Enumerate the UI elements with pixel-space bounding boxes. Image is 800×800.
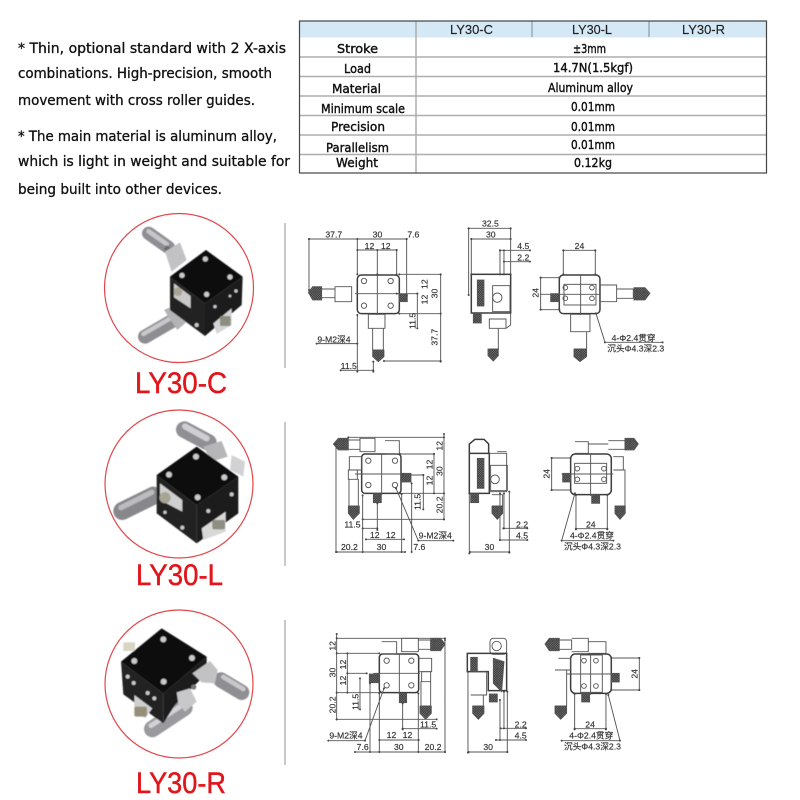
front view: 11.5: [413, 494, 423, 510]
specification table: 0.01mm: [571, 100, 615, 114]
panel: LY30-C product photo: [104, 214, 254, 362]
bottom view: [545, 638, 639, 751]
side view: [469, 218, 530, 361]
side view: 32.5: [482, 218, 499, 228]
front view: 11.5: [341, 361, 357, 371]
specification table: LY30-L: [572, 23, 612, 37]
label: LY30-L: LY30-L: [136, 559, 223, 592]
front view: 30: [435, 466, 445, 476]
front view: 37.7: [429, 329, 439, 346]
bottom view: 沉头Φ4.3深2.3: [564, 741, 621, 751]
panel: LY30-R technical drawing: [327, 634, 639, 753]
front view: 11.5: [408, 313, 418, 329]
front view: 12: [338, 660, 348, 669]
specification table: 0.01mm: [571, 138, 615, 152]
front view: 12: [338, 676, 348, 685]
front view: 7.6: [407, 230, 420, 240]
front view: 12: [403, 730, 412, 740]
side view: 2.2: [515, 719, 527, 729]
description text: * Thin, optional standard with 2 X-axis: [18, 41, 286, 57]
front view: 12: [419, 295, 429, 304]
front view: 12: [370, 530, 380, 540]
front view: 12: [435, 441, 445, 451]
bottom view: 24: [586, 519, 596, 529]
front view: 12: [419, 279, 429, 289]
front view: 12: [425, 476, 435, 485]
side view: [467, 638, 527, 753]
description text: [18, 41, 290, 198]
bottom view: [531, 241, 664, 362]
front view: 9-M2深4: [419, 531, 452, 541]
specification table: Precision: [331, 120, 385, 134]
front view: 12: [387, 730, 396, 740]
description text: being built into other devices.: [18, 182, 222, 198]
side view: 2.2: [516, 519, 528, 529]
bottom view: [541, 438, 638, 551]
panel: LY30-L product photo: [105, 410, 253, 558]
front view: 7.6: [357, 742, 369, 752]
side view: 30: [486, 230, 496, 240]
panel: LY30-R product photo: [105, 610, 253, 758]
front view: 12: [365, 241, 374, 251]
front view: 7.6: [413, 542, 426, 552]
specification table: 0.12kg: [574, 156, 612, 170]
description text: * The main material is aluminum alloy,: [18, 129, 277, 145]
front view: [327, 634, 445, 752]
divider bars: [284, 223, 286, 765]
specification table: Material: [332, 82, 381, 96]
side view: 30: [483, 742, 493, 752]
side view: [469, 439, 528, 553]
bottom view: 24: [541, 469, 551, 479]
front view: 12: [425, 460, 435, 469]
front view: [308, 230, 441, 372]
front view: 11.5: [420, 719, 436, 729]
description text: combinations. High-precision, smooth: [18, 66, 272, 82]
panel: LY30-C technical drawing: [308, 218, 664, 372]
description text: which is light in weight and suitable for: [18, 154, 290, 170]
specification table: 14.7N(1.5kgf): [553, 61, 633, 75]
front view: 9-M2深4: [317, 334, 351, 344]
front view: 20.2: [425, 742, 442, 752]
bottom view: 沉头Φ4.3深2.3: [607, 344, 664, 354]
bottom view: 24: [575, 241, 584, 251]
front view: 20.2: [327, 696, 337, 713]
bottom view: 24: [629, 669, 639, 679]
bottom view: 沉头Φ4.3深2.3: [564, 541, 621, 551]
front view: 12: [381, 241, 391, 251]
specification table: ±3mm: [573, 42, 606, 56]
front view: 20.2: [341, 542, 358, 552]
specification table: LY30-R: [682, 23, 725, 37]
bottom view: 24: [585, 719, 595, 729]
front view: 30: [327, 668, 337, 677]
front view: 30: [377, 542, 386, 552]
specification table: 0.01mm: [571, 120, 615, 134]
side view: 2.2: [517, 252, 530, 262]
front view: 37.7: [325, 230, 342, 240]
front view: [333, 434, 453, 552]
front view: 30: [373, 230, 382, 240]
front view: 12: [386, 530, 396, 540]
front view: 11.5: [344, 519, 361, 529]
side view: 30: [485, 542, 494, 552]
front view: 20.2: [435, 496, 445, 513]
specification table: Minimum scale: [321, 102, 405, 116]
specification table: [300, 21, 766, 173]
specification table: LY30-C: [450, 23, 493, 37]
side view: 4.5: [516, 531, 528, 541]
side view: 4.5: [517, 241, 530, 251]
front view: 12: [327, 641, 337, 651]
bottom view: 4-Φ2.4贯穿: [612, 332, 656, 343]
bottom view: 4-Φ2.4贯穿: [570, 530, 614, 541]
front view: 30: [429, 289, 439, 298]
panel: LY30-L technical drawing: [333, 434, 638, 553]
specification table: Aluminum alloy: [548, 81, 633, 95]
specification table: Parallelism: [326, 141, 389, 155]
side view: 4.5: [515, 731, 527, 741]
front view: 11.5: [351, 694, 361, 710]
specification table: Load: [344, 62, 371, 76]
specification table: Weight: [336, 156, 378, 170]
bottom view: 24: [531, 288, 541, 298]
bottom view: 4-Φ2.4贯穿: [569, 730, 613, 741]
specification table: Stroke: [337, 42, 378, 56]
description text: movement with cross roller guides.: [18, 93, 255, 109]
front view: 9-M2深4: [329, 731, 363, 741]
label: LY30-C: LY30-C: [135, 367, 227, 400]
label: LY30-R: LY30-R: [136, 767, 226, 800]
front view: 30: [394, 742, 404, 752]
